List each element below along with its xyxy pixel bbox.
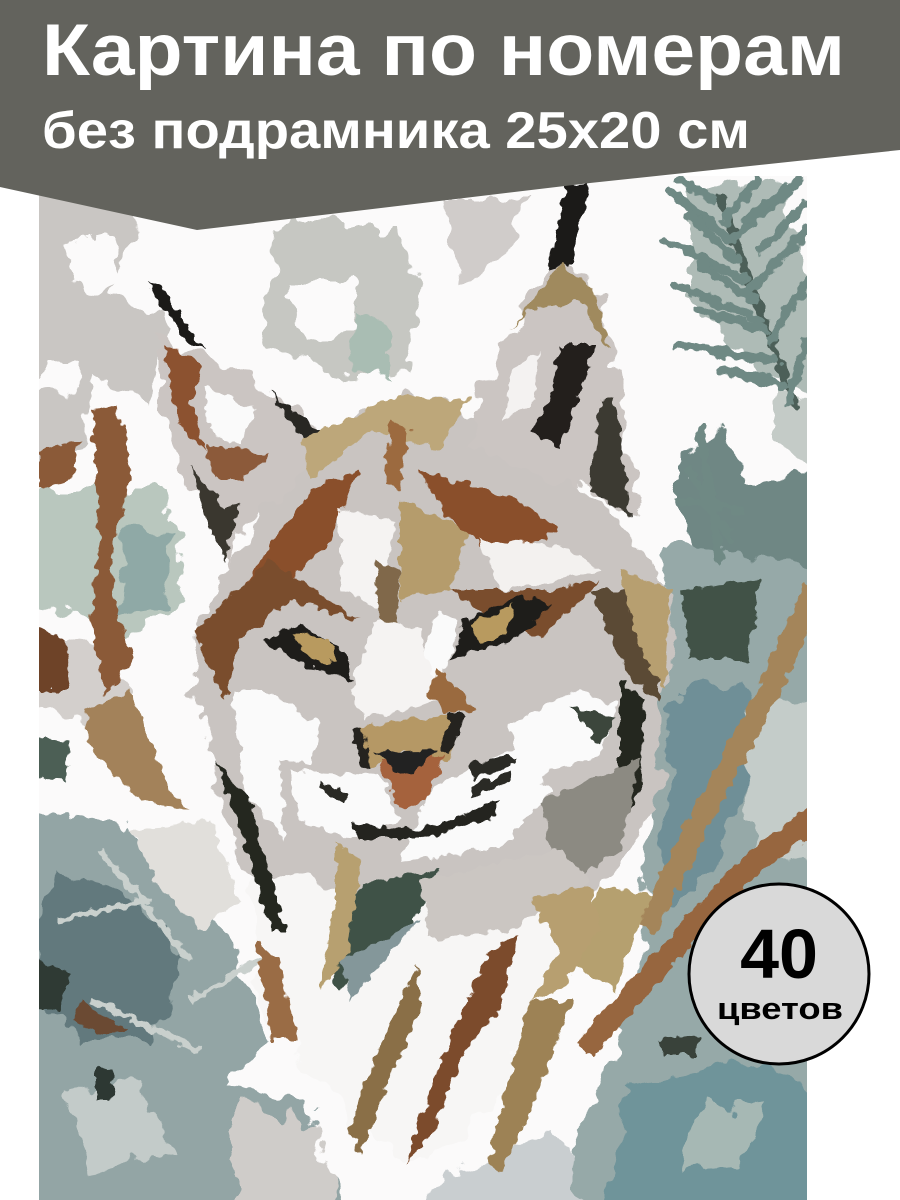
- pine branch needles: [665, 178, 807, 560]
- lynx head: [195, 395, 670, 840]
- header banner: [0, 0, 900, 230]
- subtitle: без подрамника 25х20 см: [42, 102, 750, 160]
- badge: 40 colours: 40: [740, 915, 818, 993]
- right foliage and branches: [575, 580, 815, 1055]
- left twigs: [20, 405, 190, 810]
- lower left pine details: [20, 820, 260, 1100]
- badge: 40 colours: цветов: [717, 991, 843, 1026]
- background tonal masses: [20, 170, 830, 1200]
- head base: [190, 395, 680, 910]
- lynx muzzle: [290, 620, 550, 860]
- lynx ears: [146, 183, 630, 560]
- title: Картина по номерам: [42, 10, 845, 91]
- pine: [690, 180, 815, 400]
- chest: [255, 840, 600, 1175]
- cheek ruff and dark lines: [215, 680, 645, 930]
- painting: lynx by numbers: [20, 170, 830, 1200]
- lynx eyes: [263, 594, 552, 683]
- right side: [540, 520, 830, 1200]
- badge: 40 colours: [689, 884, 869, 1064]
- chest base: [250, 830, 590, 1180]
- lower left: [20, 810, 345, 1200]
